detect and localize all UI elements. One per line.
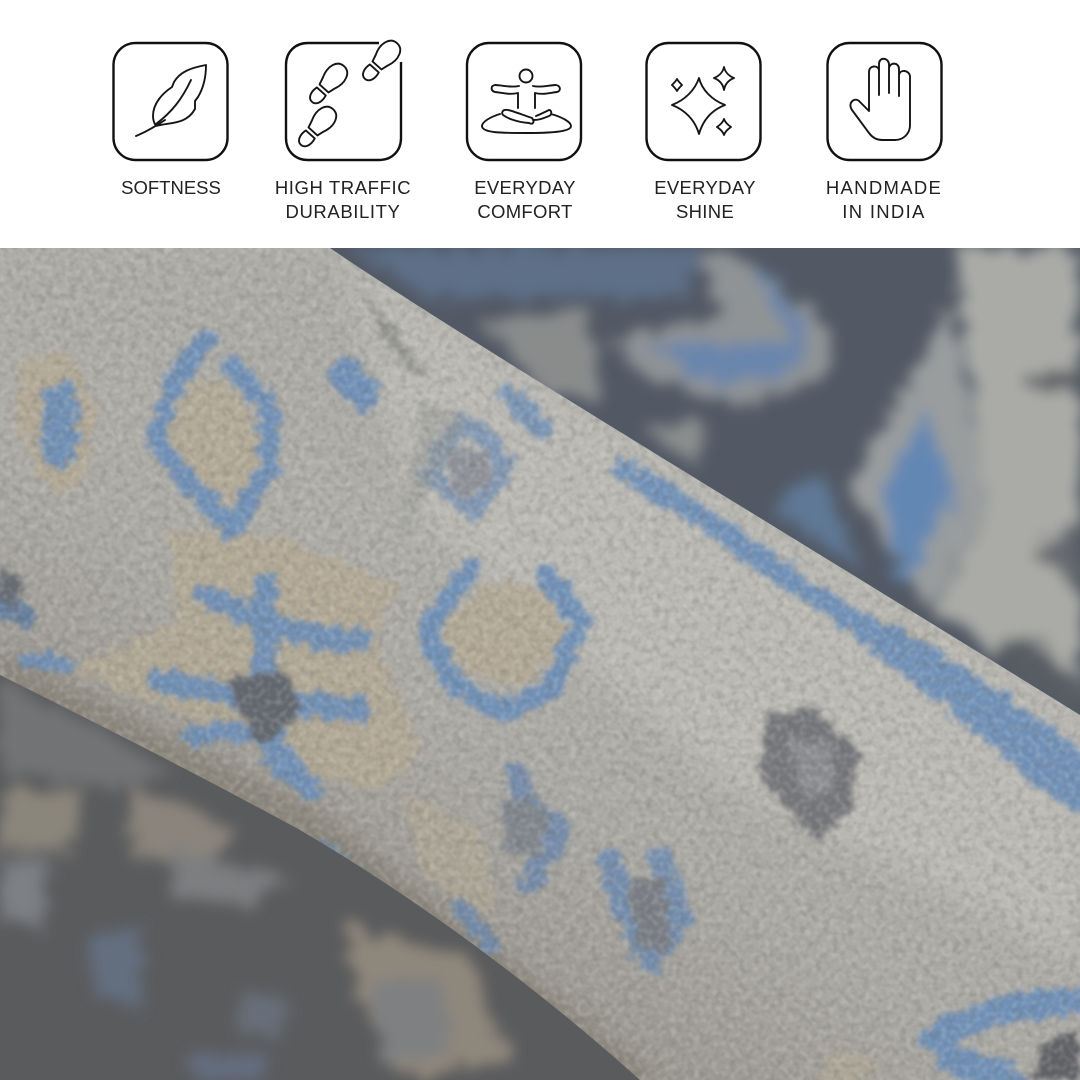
icon: softness feather (112, 42, 229, 162)
label: everyday shine: EVERYDAY (654, 177, 756, 198)
lighter field along the roll (340, 260, 1080, 960)
label: everyday comfort: COMFORT (477, 200, 573, 222)
icon row (0, 0, 1080, 248)
shaded lower edge (0, 650, 660, 1080)
label: handmade in india: HANDMADE (826, 177, 942, 198)
label: handmade in india: IN INDIA (842, 200, 926, 222)
tan motif areas (15, 350, 935, 1080)
photo: rolled rug close-up (0, 248, 1080, 1080)
icon: handmade hand (826, 42, 943, 162)
label: everyday shine (654, 177, 756, 222)
label: everyday comfort (474, 177, 576, 222)
label: handmade in india (826, 177, 942, 222)
label: everyday shine: SHINE (676, 200, 734, 222)
wool loop texture (0, 248, 1080, 1080)
background rug top right (330, 248, 1080, 728)
label: high traffic durability: DURABILITY (286, 200, 400, 222)
label: softness: SOFTNESS (121, 177, 221, 198)
icon: everyday comfort meditating figure (466, 42, 582, 162)
rolled rug body (0, 248, 1080, 1080)
label: high traffic durability (275, 177, 411, 222)
label: high traffic durability: HIGH TRAFFIC (275, 177, 411, 198)
label: everyday comfort: EVERYDAY (474, 177, 576, 198)
icon: high traffic durability footprints (284, 40, 402, 162)
background rug bottom left (0, 660, 660, 1080)
grey motif patches (0, 280, 1080, 1080)
icon: everyday shine sparkles (645, 42, 762, 162)
blue motif strokes (0, 340, 1080, 1080)
